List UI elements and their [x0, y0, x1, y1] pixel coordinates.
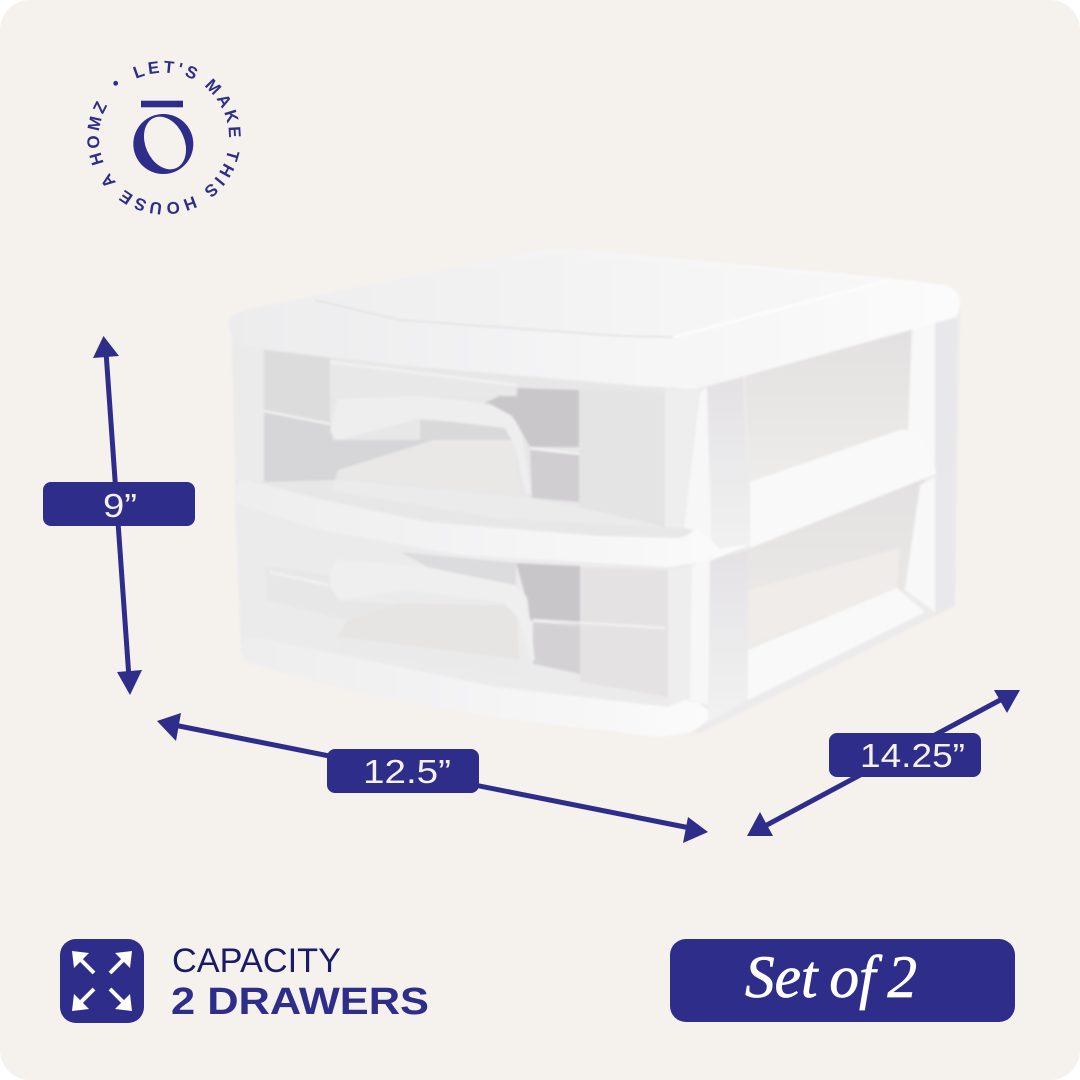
- logo mark: [133, 101, 194, 176]
- height arrow: [93, 336, 142, 695]
- circular slogan: LET'S MAKE THIS HOUSE A HOMZ: [87, 60, 241, 214]
- right side panels: [745, 317, 957, 700]
- lower tray: [337, 603, 520, 660]
- top lid: [229, 248, 960, 389]
- product: two drawer storage unit: [229, 248, 960, 737]
- logo badge: [87, 60, 241, 214]
- height label: 9”: [103, 487, 137, 524]
- set of 2 badge: Set of 2: [745, 944, 917, 1010]
- width label: [327, 749, 479, 793]
- bottom rim: [240, 637, 715, 737]
- capacity block: [60, 939, 429, 1023]
- product silhouette: [232, 310, 960, 737]
- width arrow: [157, 713, 708, 843]
- front pillars: [684, 377, 750, 722]
- lower drawer: [235, 504, 715, 737]
- depth label: [829, 733, 981, 777]
- icon: expand arrows: [60, 939, 144, 1023]
- capacity label: CAPACITY: [172, 942, 341, 980]
- upper drawer: [232, 346, 707, 550]
- lower handle: [330, 560, 535, 660]
- height dimension: [43, 336, 195, 695]
- upper tray: [338, 441, 520, 495]
- width dimension: [157, 713, 708, 843]
- set of 2 badge: [670, 939, 1015, 1022]
- depth dimension: [747, 690, 1020, 836]
- capacity value: 2 DRAWERS: [171, 981, 429, 1023]
- middle rim: [234, 480, 750, 567]
- width label: 12.5”: [363, 753, 451, 790]
- depth arrow: [747, 690, 1020, 836]
- depth label: 14.25”: [860, 737, 965, 774]
- upper label plate: [330, 362, 517, 396]
- height label: [43, 482, 195, 526]
- upper handle: [330, 396, 531, 494]
